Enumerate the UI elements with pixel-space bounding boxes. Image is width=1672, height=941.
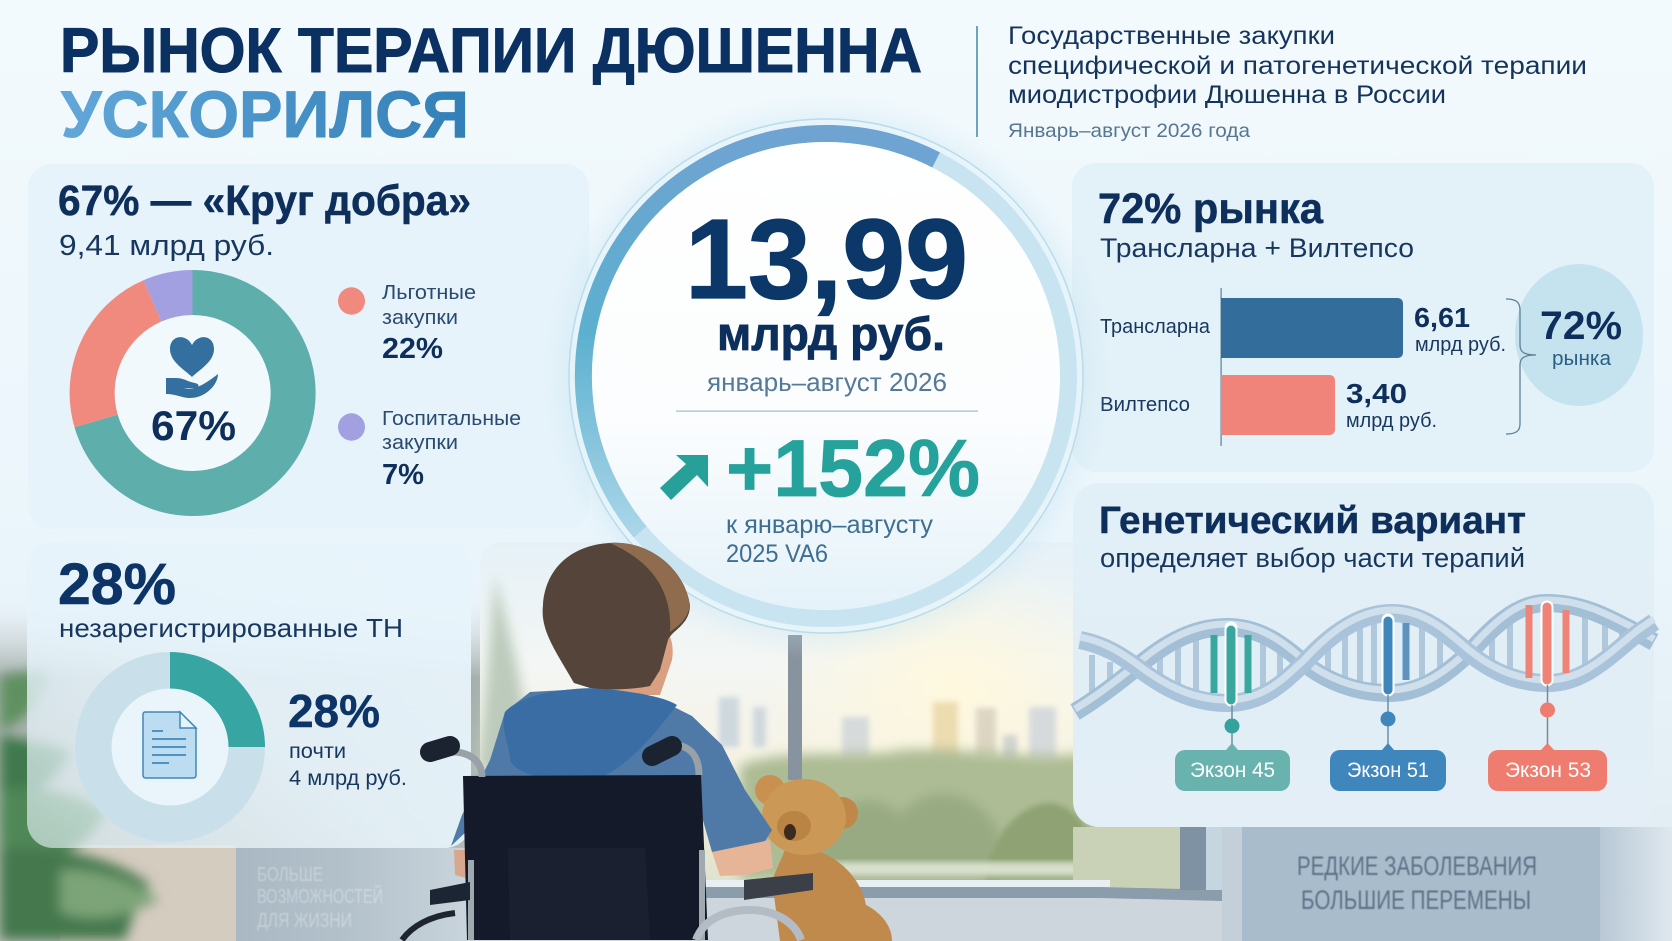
bar chart: млрд руб. <box>1415 334 1506 356</box>
neck and ear <box>600 620 673 695</box>
donut chart 28% <box>93 652 265 824</box>
ghost wall text <box>257 864 383 932</box>
value 28%: 28% <box>288 685 380 737</box>
legend: Льготные закупки: Льготные <box>382 282 476 304</box>
highlight: exon 53: Экзон 53 <box>1505 759 1591 782</box>
armrests <box>744 873 813 900</box>
blurred houseplant <box>0 672 160 940</box>
bracket <box>1506 299 1536 434</box>
text: почти 4 млрд руб. <box>289 739 407 790</box>
legend: Госпитальные закупки: 7% <box>382 459 424 491</box>
photo: teddy bear <box>755 775 892 941</box>
highlight: exon 45: Экзон 45 <box>1190 759 1275 782</box>
photo: boy in wheelchair <box>402 543 813 940</box>
big value 28%: 28% <box>58 552 176 617</box>
bar chart <box>1100 288 1506 446</box>
subheading: определяет выбор части терапий <box>1100 543 1525 573</box>
wheels <box>696 910 801 940</box>
highlight: exon 51: Экзон 51 <box>1347 759 1429 782</box>
wheelchair handles <box>445 752 482 777</box>
subheading: Трансларна + Вилтепсо <box>1100 233 1414 263</box>
panel: 72% рынка <box>1072 163 1654 472</box>
icon: growth arrow <box>660 455 708 500</box>
legend: Льготные закупки: закупки <box>382 307 458 329</box>
growth value: +152% <box>726 424 980 514</box>
legend: Госпитальные закупки <box>338 408 521 491</box>
highlight: exon 53 <box>1488 605 1607 791</box>
header description <box>976 22 1587 142</box>
comparison text <box>726 511 933 568</box>
legend: Льготные закупки: 22% <box>382 333 443 365</box>
panel: Круг добра <box>28 164 589 529</box>
photo background: room and window <box>0 542 1672 941</box>
donut centre value: 67% <box>151 402 236 449</box>
progress arc <box>583 133 936 532</box>
central circle <box>541 91 1111 661</box>
highlight: exon 45 <box>1175 628 1290 791</box>
unit млрд руб.: млрд руб. <box>717 307 945 360</box>
ghost wall text: ДЛЯ ЖИЗНИ <box>257 910 352 932</box>
callout: 72% рынка: 72% <box>1540 304 1622 348</box>
legend: Льготные закупки <box>338 282 476 365</box>
text: почти 4 млрд руб.: почти <box>289 739 346 763</box>
wheelchair frame <box>471 850 702 940</box>
title: РЫНОК ТЕРАПИИ ДЮШЕННА <box>60 16 922 86</box>
header description: Государственные закупки <box>1008 22 1335 50</box>
label: незарегистрированные ТН: незарегистрированные ТН <box>59 613 403 643</box>
bar chart: 3,40 <box>1346 378 1407 409</box>
bar chart: Вилтепсо <box>1100 394 1190 416</box>
header description: Январь–август 2026 года <box>1008 120 1250 142</box>
wall sign text: БОЛЬШИЕ ПЕРЕМЕНЫ <box>1301 885 1531 915</box>
heading: Генетический вариант <box>1099 500 1526 542</box>
ghost wall text: БОЛЬШЕ <box>257 864 323 886</box>
title: УСКОРИЛСЯ <box>61 77 469 151</box>
header description: миодистрофии Дюшенна в России <box>1008 81 1446 109</box>
panel: 28% незарегистрированные ТН <box>27 542 471 848</box>
ghost wall text: ВОЗМОЖНОСТЕЙ <box>257 884 383 908</box>
legend: Госпитальные закупки: закупки <box>382 432 458 454</box>
shirt <box>451 688 772 852</box>
header description: специфической и патогенетической терапии <box>1008 52 1587 80</box>
comparison text: 2025 VA6 <box>726 540 828 568</box>
icon: heart in hand <box>166 337 218 398</box>
wheelchair back <box>463 775 708 940</box>
wall sign text: РЕДКИЕ ЗАБОЛЕВАНИЯ <box>1297 851 1537 881</box>
arms <box>712 840 773 876</box>
donut chart: 67 / 22 / 7 <box>70 270 316 516</box>
subheading: 9,41 млрд руб.: 9,41 млрд руб. <box>59 230 274 262</box>
bar chart: 6,61 <box>1414 302 1470 333</box>
text: почти 4 млрд руб.: 4 млрд руб. <box>289 766 407 790</box>
icon: document <box>143 712 196 778</box>
comparison text: к январю–августу <box>726 511 933 539</box>
callout: 72% рынка <box>1515 264 1643 406</box>
hair <box>543 543 690 689</box>
title <box>60 16 922 151</box>
callout: 72% рынка: рынка <box>1552 348 1612 370</box>
wall sign text <box>1297 851 1537 915</box>
highlight: exon 51 <box>1330 620 1446 791</box>
DNA helix <box>1075 600 1654 712</box>
heading: 72% рынка <box>1098 185 1324 233</box>
bar chart: млрд руб. <box>1346 410 1437 432</box>
hood <box>504 688 677 783</box>
main value 13,99: 13,99 <box>685 196 968 322</box>
heading: 67% Круг добра: 67% — «Круг добра» <box>58 177 471 225</box>
period: январь–август 2026 <box>707 367 947 397</box>
bar chart: Трансларна <box>1100 316 1211 338</box>
panel: Генетический вариант <box>1073 483 1654 827</box>
legend: Госпитальные закупки: Госпитальные <box>382 408 521 430</box>
